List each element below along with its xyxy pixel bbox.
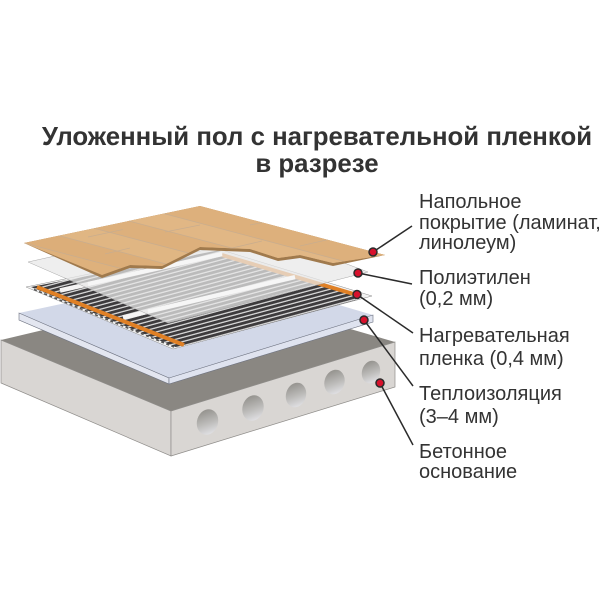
label: insulation [419, 383, 562, 428]
label: floor covering: покрытие (ламинат, [419, 212, 600, 234]
label: polyethylene: Полиэтилен [419, 267, 531, 289]
white conductor gaps [60, 254, 222, 290]
label: concrete base: основание [419, 461, 517, 483]
label: floor covering: Напольное [419, 191, 521, 213]
insulation layer [19, 270, 373, 384]
label: insulation: (3–4 мм) [419, 406, 499, 428]
label: floor covering [419, 191, 600, 254]
title [42, 123, 592, 178]
label: polyethylene [419, 267, 531, 310]
icon: slab holes [194, 358, 383, 438]
leader line: polyethylene [354, 269, 412, 284]
laminate floor covering [24, 206, 385, 278]
label: concrete base [419, 441, 517, 483]
label: concrete base: Бетонное [419, 441, 507, 463]
white bars seen through sheet [88, 254, 222, 284]
orange bus strip [37, 287, 184, 345]
heating film [26, 248, 372, 349]
label: polyethylene: (0,2 мм) [419, 288, 493, 310]
concrete base slab [1, 326, 395, 456]
leader line: heating film [353, 290, 413, 333]
polyethylene sheet [28, 218, 368, 323]
title: в разрезе [255, 150, 379, 178]
strip edge contacts [34, 290, 174, 347]
label: heating film [419, 325, 570, 370]
leader line: insulation [360, 316, 413, 386]
plank rows [122, 264, 166, 268]
leader line: floor covering [369, 226, 412, 256]
label: insulation: Теплоизоляция [419, 383, 562, 405]
label: heating film: пленка (0,4 мм) [419, 348, 564, 370]
title: Уложенный пол с нагревательной пленкой [42, 123, 592, 151]
label: floor covering: линолеум) [419, 232, 516, 254]
label: heating film: Нагревательная [419, 325, 570, 347]
floor cross-section diagram [1, 206, 395, 456]
leader line: concrete base [376, 379, 413, 445]
